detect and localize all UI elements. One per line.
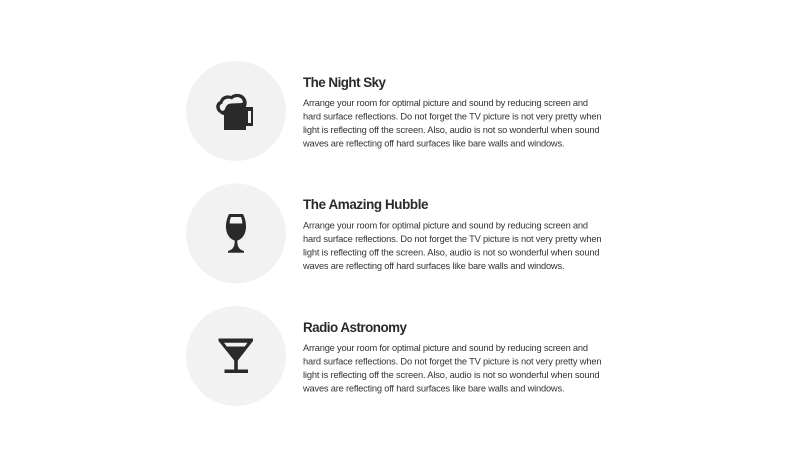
panel: radio astronomy [186,306,602,406]
heading: The Amazing Hubble [303,197,428,212]
text block: Arrange your room for optimal picture and sound by reducing screen and [303,98,588,108]
icon: martini glass [186,306,286,406]
text block: waves are reflecting off hard surfaces like bare walls and windows. [302,138,564,148]
text block: light is reflecting off the screen. Also, audio is not so wonderful when sound [303,248,600,258]
text block: hard surface reflections. Do not forget the TV picture is not very pretty when [303,112,602,122]
panel: the night sky [186,61,602,161]
text block: Arrange your room for optimal picture and sound by reducing screen and [303,343,588,353]
text block: light is reflecting off the screen. Also, audio is not so wonderful when sound [303,125,600,135]
text block: hard surface reflections. Do not forget the TV picture is not very pretty when [303,356,602,366]
icon: beer mug [186,61,286,161]
text block: hard surface reflections. Do not forget the TV picture is not very pretty when [303,234,602,244]
text block [302,98,602,148]
text block [302,343,602,394]
text block [302,220,602,271]
text block: waves are reflecting off hard surfaces like bare walls and windows. [302,384,564,394]
text block: waves are reflecting off hard surfaces like bare walls and windows. [302,261,564,271]
heading: The Night Sky [303,75,387,90]
text block: Arrange your room for optimal picture and sound by reducing screen and [303,220,588,230]
text block: light is reflecting off the screen. Also, audio is not so wonderful when sound [303,370,600,380]
heading: Radio Astronomy [303,320,408,335]
icon: wine glass [186,184,286,284]
panel: the amazing hubble [186,184,602,284]
